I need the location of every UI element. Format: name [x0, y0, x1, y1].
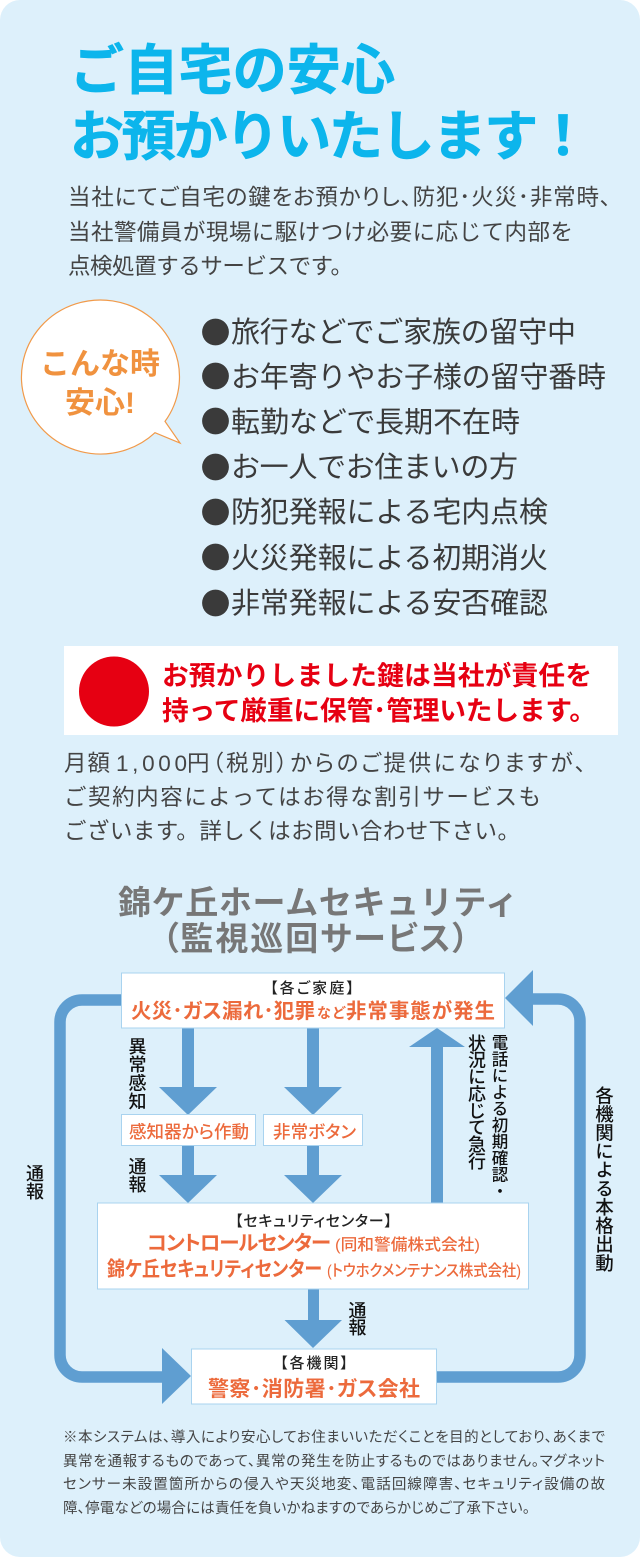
speech bubble: 安心! — [65, 387, 135, 420]
box: each household: 火災･ガス漏れ･犯罪 — [131, 1000, 315, 1023]
arrow: agencies to household — [436, 970, 580, 1377]
box: each household: 【各ご家庭】 — [270, 979, 354, 997]
flow diagram — [24, 970, 614, 1404]
footnote — [63, 1429, 605, 1517]
intro text: 点検処置するサービスです。 — [68, 254, 353, 279]
pricing text: ご契約内容によってはお得な割引サービスも — [64, 785, 541, 810]
speech bubble: こんな時 — [40, 348, 160, 381]
intro text: 当社にてご自宅の鍵をお預かりし、防犯･火災･非常時、 — [68, 185, 611, 210]
label: rush to site: 状況に応じて急行 — [466, 1034, 486, 1170]
arrow: household to agencies — [60, 1000, 191, 1404]
box: sensor: 感知器から作動 — [129, 1122, 249, 1142]
title: お預かりいたします！ — [70, 107, 590, 167]
label: report lower: 通報 — [346, 1301, 366, 1337]
box: agencies — [192, 1349, 436, 1404]
arrow: button to centre — [284, 1146, 342, 1203]
reassurance list — [202, 316, 606, 620]
box: security centre — [98, 1203, 528, 1289]
pricing text: ございます。詳しくはお問い合わせ下さい。 — [64, 818, 520, 844]
label: anomaly detection: 異常感知 — [126, 1037, 146, 1110]
footnote: センサー未設置箇所からの侵入や天災地変、電話回線障害、セキュリティ設備の故 — [63, 1476, 605, 1493]
box: emergency button — [264, 1114, 362, 1146]
key custody notice: お預かりしました鍵は当社が責任を — [162, 661, 592, 691]
title: ご自宅の安心 — [70, 41, 395, 101]
box: each household: 非常事態が発生 — [346, 999, 495, 1023]
arrow: centre to agencies — [284, 1289, 342, 1348]
speech bubble — [21, 300, 180, 454]
pricing text: 円（税別）からのご提供になりますが、 — [187, 751, 586, 776]
key custody notice — [64, 646, 618, 735]
arrow: emergency button — [284, 1028, 342, 1115]
box: security centre: 錦ケ丘セキュリティセンター — [107, 1258, 322, 1281]
box: agencies: 【各機関】 — [280, 1354, 348, 1372]
reassurance list: 旅行などでご家族の留守中 — [231, 316, 576, 349]
footnote: ※本システムは、導入により安心してお住まいいただくことを目的としており、あくまで — [63, 1429, 605, 1446]
key custody notice: 持って厳重に保管･管理いたします。 — [162, 696, 596, 726]
label: agency dispatch: 各機関による本格出動 — [594, 1086, 614, 1272]
box: emergency button: 非常ボタン — [273, 1122, 356, 1142]
label: report centre: 通報 — [126, 1157, 146, 1194]
title — [70, 41, 590, 167]
reassurance list: 非常発報による安否確認 — [231, 587, 548, 620]
reassurance list: お一人でお住まいの方 — [231, 451, 518, 484]
box: security centre: コントロールセンター — [147, 1232, 331, 1255]
reassurance list: 転勤などで長期不在時 — [231, 406, 520, 439]
reassurance list: 防犯発報による宅内点検 — [231, 496, 548, 529]
reassurance list: 火災発報による初期消火 — [231, 542, 548, 575]
footnote: 障、停電などの場合には責任を負いかねますのであらかじめご了承下さい。 — [63, 1500, 530, 1517]
box: sensor — [122, 1114, 256, 1146]
arrow: detection — [159, 1028, 217, 1115]
reassurance list: お年寄りやお子様の留守番時 — [231, 361, 606, 394]
intro text: 当社警備員が現場に駆けつけ必要に応じて内部を — [68, 220, 573, 245]
diagram heading: （監視巡回サービス） — [162, 920, 469, 957]
box: each household: など — [317, 1005, 346, 1021]
box: agencies: 警察･消防署･ガス会社 — [208, 1378, 420, 1401]
label: phone check: 電話による初期確認・ — [489, 1034, 508, 1199]
box: security centre: (トウホクメンテナンス株式会社) — [327, 1262, 521, 1280]
footnote: 異常を通報するものであって、異常の発生を防止するものではありません。マグネット — [63, 1453, 605, 1470]
pricing text: 月額 — [64, 751, 110, 776]
intro text — [68, 185, 611, 279]
diagram heading — [118, 884, 518, 957]
box: security centre: 【セキュリティセンター】 — [235, 1213, 392, 1230]
diagram heading: 錦ケ丘ホームセキュリティ — [118, 884, 518, 921]
pricing text — [64, 751, 586, 844]
label: report left: 通報 — [24, 1164, 44, 1201]
arrow: sensor to centre — [159, 1146, 217, 1203]
pricing text: 1,000 — [116, 751, 187, 776]
box: security centre: (同和警備株式会社) — [335, 1235, 480, 1254]
arrow: centre to household — [409, 1028, 465, 1204]
box: each household — [122, 973, 504, 1028]
